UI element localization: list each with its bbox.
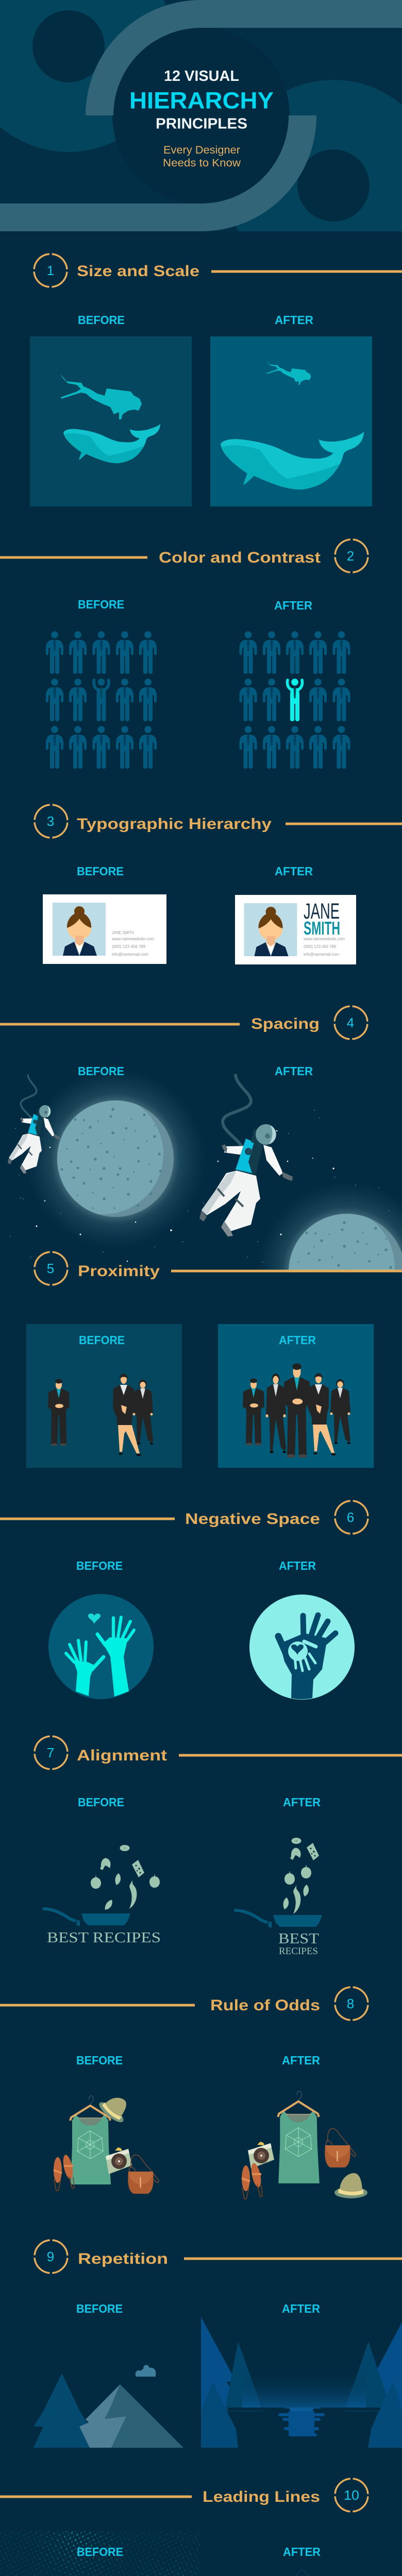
- landscape: after: [201, 2317, 402, 2448]
- panel: before: BEFORE: [79, 1333, 125, 1347]
- label: after: AFTER: [275, 865, 313, 878]
- label: after: AFTER: [274, 599, 312, 612]
- heading: proximity: 5: [47, 1261, 54, 1276]
- heading: rule of odds: Rule of Odds: [210, 1997, 320, 2014]
- logo: best recipes after: [236, 1838, 322, 1957]
- central disc: [112, 27, 290, 204]
- icon: two hands: [48, 1594, 154, 1699]
- dot pattern: before: [0, 2531, 200, 2576]
- business card: before: [43, 894, 166, 964]
- business card: before: (000) 123 456 789: [112, 944, 146, 949]
- heading: typographic hierarchy: Typographic Hierarchy: [77, 816, 272, 833]
- title: 12 VISUAL: [164, 68, 239, 84]
- label: after: AFTER: [282, 2302, 320, 2315]
- outfit: before: [54, 2089, 159, 2194]
- section 5: proximity: [26, 1252, 402, 1468]
- heading: color and contrast: 2: [347, 548, 354, 564]
- heading: size and scale: [34, 254, 402, 287]
- panel: after: [218, 1324, 374, 1468]
- label: after: AFTER: [282, 2054, 320, 2067]
- business card: after: JANE: [304, 899, 340, 924]
- section 2: color and contrast: [0, 539, 368, 769]
- heading: spacing: 4: [347, 1015, 354, 1030]
- heading: leading lines: [0, 2479, 368, 2512]
- stars: [10, 1110, 390, 1263]
- business card: before: JANE SMITH: [112, 930, 134, 935]
- section 3: typographic hierarchy: [35, 805, 402, 964]
- label: before: BEFORE: [78, 313, 125, 327]
- heading: negative space: 6: [347, 1510, 354, 1525]
- header background shapes: [0, 0, 402, 231]
- section 1: size and scale: [30, 254, 402, 506]
- subtitle: Every Designer: [163, 144, 240, 156]
- label: after: AFTER: [275, 1064, 313, 1078]
- heading: negative space: Negative Space: [185, 1511, 320, 1528]
- label: before: BEFORE: [78, 1064, 124, 1078]
- heading: size and scale: Size and Scale: [77, 263, 199, 280]
- label: before: BEFORE: [78, 598, 124, 611]
- heading: typographic hierarchy: 3: [47, 814, 54, 829]
- subtitle: Needs to Know: [163, 157, 241, 169]
- business card: before: info@namemail.com: [112, 952, 148, 957]
- title: HIERARCHY: [129, 88, 274, 113]
- heading: color and contrast: [0, 539, 368, 572]
- label: before: BEFORE: [77, 2545, 123, 2558]
- heading: alignment: [35, 1736, 402, 1769]
- heading: proximity: [35, 1252, 402, 1285]
- illustration: planet before: [25, 1069, 206, 1249]
- section 7: alignment: [35, 1736, 402, 1957]
- panel: after: [210, 336, 372, 506]
- panel: before: [26, 1324, 182, 1468]
- logo: best recipes after: BEST: [278, 1930, 319, 1947]
- heading: alignment: 7: [47, 1745, 54, 1760]
- business card: after: (000) 123 456 789: [304, 944, 337, 949]
- landscape: before: [34, 2365, 183, 2448]
- header banner: [0, 0, 402, 231]
- subtitle: [163, 144, 241, 169]
- illustration: astronaut before: [8, 1075, 60, 1174]
- chevron lines: after: [295, 2569, 309, 2576]
- business card: after: [235, 895, 356, 964]
- heading: repetition: Repetition: [78, 2250, 168, 2267]
- logo: best recipes before: [44, 1845, 161, 1946]
- heading: spacing: [0, 1006, 367, 1039]
- heading: proximity: Proximity: [78, 1263, 160, 1280]
- people grid: before: [46, 631, 157, 769]
- section 4: spacing: [0, 1005, 402, 1269]
- business card: before: www.namewebsite.com: [111, 937, 154, 941]
- section 8: rule of odds: [0, 1987, 368, 2199]
- logo: best recipes before: BEST RECIPES: [47, 1929, 161, 1946]
- logo: best recipes after: RECIPES: [279, 1946, 318, 1957]
- business card: after: SMITH: [304, 918, 340, 939]
- label: before: BEFORE: [76, 1559, 123, 1572]
- heading: repetition: 9: [47, 2249, 54, 2264]
- panel: before: [30, 336, 192, 506]
- heading: spacing: Spacing: [251, 1015, 320, 1032]
- business card: after: www.namewebsite.com: [303, 937, 345, 941]
- heading: rule of odds: 8: [347, 1996, 354, 2011]
- people grid: after: [239, 631, 350, 769]
- heading: negative space: [0, 1501, 368, 1534]
- outfit: after: [242, 2091, 367, 2199]
- section 10: leading lines: [0, 2479, 402, 2576]
- label: after: AFTER: [275, 313, 313, 327]
- heading: alignment: Alignment: [77, 1747, 167, 1764]
- heading: repetition: [35, 2240, 402, 2273]
- heading: color and contrast: Color and Contrast: [159, 549, 321, 566]
- panel: after: AFTER: [279, 1333, 316, 1347]
- label: before: BEFORE: [78, 1795, 124, 1809]
- S-shaped band: [0, 0, 402, 231]
- heading: leading lines: Leading Lines: [203, 2488, 320, 2505]
- title: [129, 68, 274, 132]
- label: after: AFTER: [283, 2545, 321, 2558]
- label: after: AFTER: [279, 1559, 316, 1572]
- icon: hand in hand: [249, 1595, 355, 1700]
- label: before: BEFORE: [76, 2054, 123, 2067]
- section 6: negative space: [0, 1501, 368, 1700]
- heading: size and scale: 1: [47, 263, 54, 278]
- illustration: astronaut after: [199, 1075, 293, 1236]
- heading: rule of odds: [0, 1987, 368, 2020]
- title: PRINCIPLES: [156, 115, 247, 132]
- heading: typographic hierarchy: [35, 805, 402, 838]
- business card: after: info@namemail.com: [304, 952, 339, 957]
- section 9: repetition: [34, 2240, 402, 2448]
- illustration: planet after: [267, 1192, 402, 1269]
- label: before: BEFORE: [76, 2302, 123, 2315]
- label: before: BEFORE: [77, 865, 124, 878]
- heading: leading lines: 10: [344, 2487, 359, 2503]
- label: after: AFTER: [283, 1795, 321, 1809]
